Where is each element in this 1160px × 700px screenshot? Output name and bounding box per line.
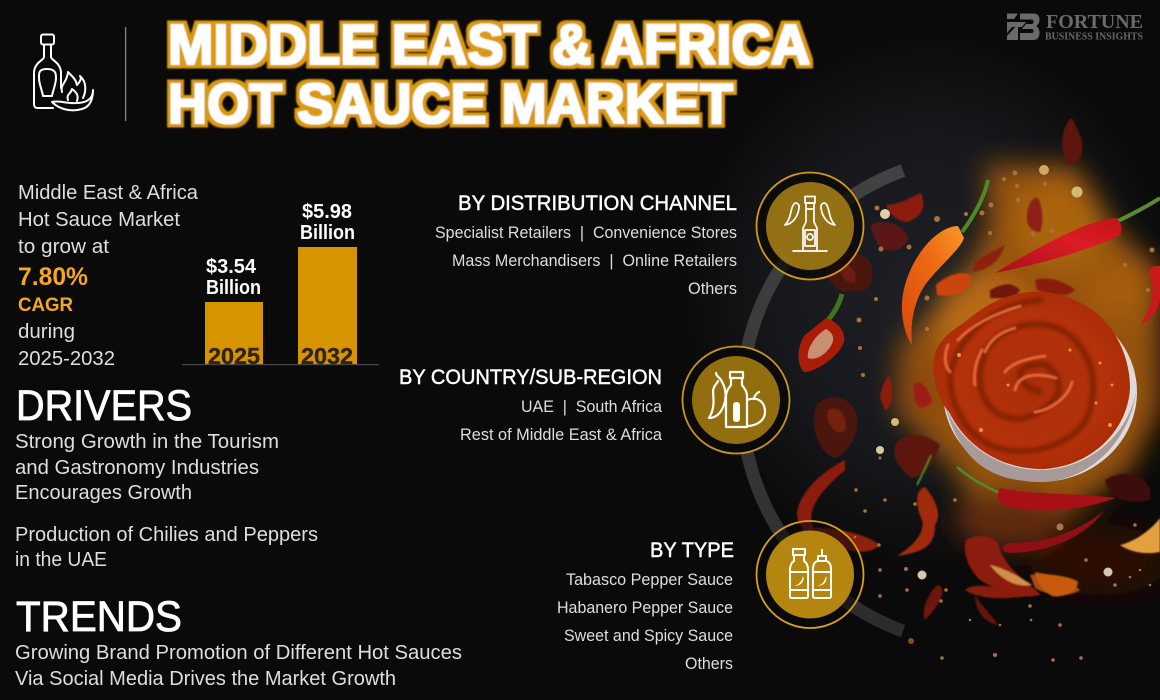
bar chart: 2032 <box>301 343 353 369</box>
orange chili <box>902 180 988 345</box>
segment: by type: BY TYPE <box>650 539 734 562</box>
drivers: Encourages Growth <box>15 482 192 504</box>
bar chart: Billion <box>300 222 355 244</box>
lower pepper group <box>897 455 1078 596</box>
segment: by country/sub-region: BY COUNTRY/SUB-REGION <box>399 366 662 389</box>
left curved dark chili <box>797 460 880 552</box>
trends: TRENDS <box>16 593 182 641</box>
drivers: in the UAE <box>15 549 107 571</box>
bar chart: $5.98 <box>302 201 352 223</box>
specks <box>854 165 1154 662</box>
trends: Via Social Media Drives the Market Growth <box>15 668 396 690</box>
CAGR text block: Middle East & Africa <box>18 182 199 204</box>
trends <box>15 593 462 690</box>
icon: distribution channel badge <box>756 172 864 280</box>
segment: by distribution channel: Others <box>688 279 737 298</box>
right edge chili <box>1140 266 1160 325</box>
segment: by distribution channel: Mass Merchandisers | Online Retailers <box>452 251 737 270</box>
CAGR text block <box>18 182 199 370</box>
segment: by type: Others <box>685 654 733 673</box>
header divider <box>125 27 126 121</box>
decorative arc <box>742 170 903 631</box>
segment: by type <box>557 539 734 673</box>
title <box>168 13 810 136</box>
lower red chili <box>957 467 1115 510</box>
dried peppers <box>814 118 1160 625</box>
drivers: DRIVERS <box>16 382 192 430</box>
bar chart <box>182 201 379 369</box>
CAGR text block: during <box>18 321 75 343</box>
CAGR text block: CAGR <box>18 294 73 316</box>
trends: Growing Brand Promotion of Different Hot Sauces <box>15 642 462 664</box>
icon: country/sub-region badge <box>682 346 790 454</box>
drivers <box>15 382 318 571</box>
segment: by country/sub-region: Rest of Middle East & Africa <box>460 425 663 444</box>
drivers: Production of Chilies and Peppers <box>15 524 318 546</box>
CAGR text block: to grow at <box>18 236 109 258</box>
bar chart: $3.54 <box>206 256 257 278</box>
CAGR text block: Hot Sauce Market <box>18 209 180 231</box>
bowl of sauce <box>934 292 1137 482</box>
segment: by country/sub-region: UAE | South Africa <box>521 397 663 416</box>
bar chart: Billion <box>206 277 261 299</box>
red chili <box>995 198 1160 273</box>
segment: by distribution channel: BY DISTRIBUTION CHANNEL <box>458 192 737 215</box>
cut red pepper <box>798 294 844 372</box>
segment: by type: Sweet and Spicy Sauce <box>564 626 733 645</box>
title: MIDDLE EAST & AFRICA <box>168 13 810 77</box>
logo: Fortune Business Insights <box>1007 11 1143 42</box>
title: HOT SAUCE MARKET <box>168 72 733 136</box>
drivers: and Gastronomy Industries <box>15 457 259 479</box>
segment: by type: Tabasco Pepper Sauce <box>566 570 733 589</box>
segment: by distribution channel <box>435 192 737 298</box>
CAGR text block: 7.80% <box>18 263 88 291</box>
logo: Fortune Business Insights: FORTUNE <box>1046 11 1143 33</box>
header icon: bottle with flame and chili <box>34 34 93 110</box>
segment: by country/sub-region <box>399 366 663 444</box>
logo: Fortune Business Insights: BUSINESS INSIGHTS <box>1045 32 1143 42</box>
segment: by distribution channel: Specialist Retailers | Convenience Stores <box>435 223 737 242</box>
photo: hot sauce bowl, chilies and spices <box>680 30 1160 662</box>
drivers: Strong Growth in the Tourism <box>15 431 279 453</box>
icon: type badge <box>756 521 864 628</box>
bar chart: 2025 <box>208 343 260 369</box>
dark curved chili <box>1002 510 1105 553</box>
CAGR text block: 2025-2032 <box>18 348 115 370</box>
segment: by type: Habanero Pepper Sauce <box>557 598 733 617</box>
